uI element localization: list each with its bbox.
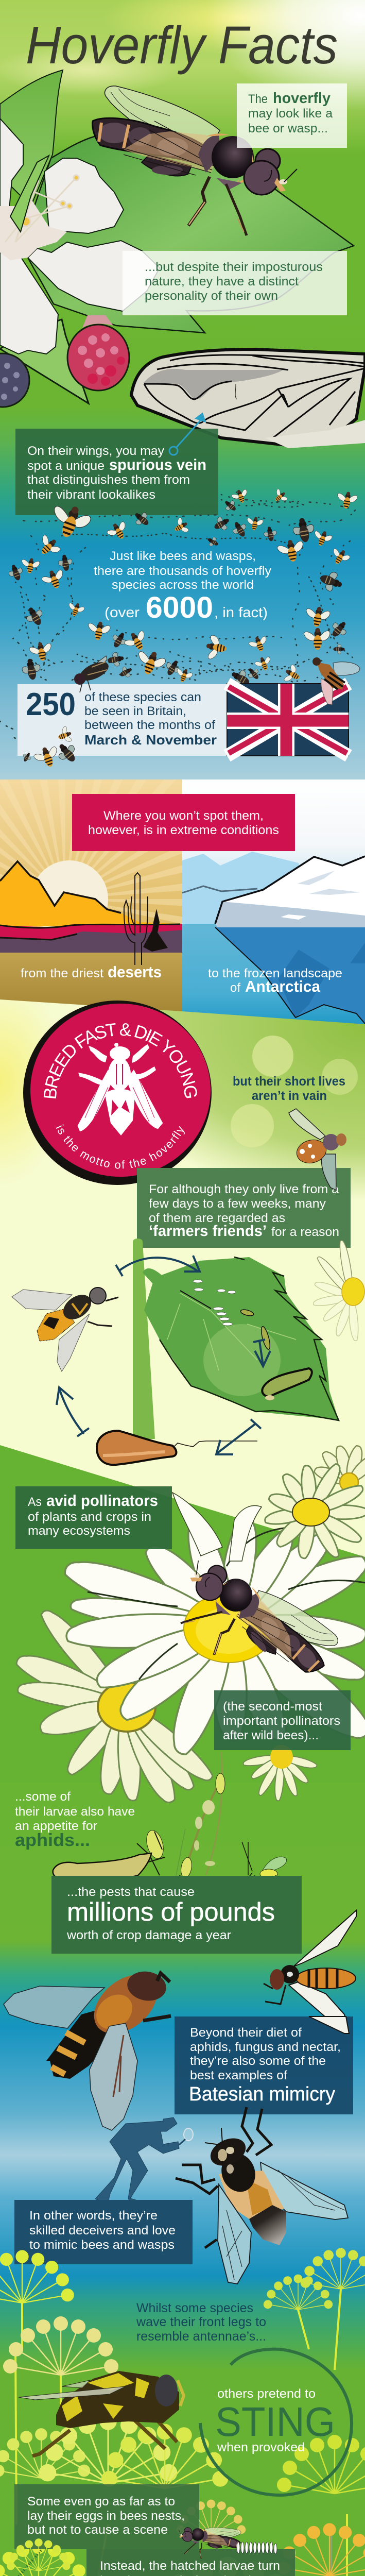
text box: second-most important: after wild bees)... bbox=[223, 1728, 319, 1742]
text: antarctica: of bbox=[230, 981, 240, 995]
text box: 250 species in Britain: 250 bbox=[26, 687, 76, 722]
daisy: small top right bbox=[312, 1240, 364, 1341]
text box: batesian mimicry bbox=[175, 2016, 353, 2114]
large orange fly on flag bbox=[312, 657, 360, 705]
text box: distinct personality: personality of their own bbox=[145, 289, 278, 303]
text box: skilled deceivers: skilled deceivers and love bbox=[29, 2224, 176, 2238]
text: short lives bbox=[233, 1074, 345, 1103]
text box: skilled deceivers bbox=[14, 2200, 193, 2264]
text box: the hoverfly: hoverfly bbox=[273, 90, 331, 107]
text box: distinct personality bbox=[123, 251, 347, 315]
stem bbox=[133, 1239, 155, 1439]
text box: 250 species in Britain: be seen in Britain, bbox=[84, 704, 186, 718]
text box: second-most important: (the second-most bbox=[223, 1700, 322, 1714]
text: wave front legs: Whilst some species bbox=[136, 2301, 253, 2315]
illustration: blossom, leaves and berries bbox=[0, 70, 354, 407]
text box: batesian mimicry: Batesian mimicry bbox=[189, 2083, 335, 2105]
text: larvae appetite for aphids: aphids... bbox=[15, 1831, 90, 1850]
bud stalk bbox=[10, 156, 49, 232]
green diagonal ground bbox=[0, 1445, 365, 1793]
stamens bbox=[5, 175, 79, 242]
text box: 250 species in Britain: of these species can bbox=[84, 690, 201, 704]
hoverfly on leaf bbox=[93, 86, 297, 235]
text box: eggs in bees nests bbox=[14, 2484, 199, 2549]
text: pretend to sting: STING bbox=[215, 2399, 335, 2445]
section background: meadow light bbox=[0, 850, 365, 1561]
text box: farmers friends: few days to a few weeks, many bbox=[149, 1197, 326, 1211]
text: thousands of species: there are thousands of hoverfly bbox=[94, 564, 271, 578]
wasp fly lower wing overlap bbox=[309, 2016, 349, 2033]
text: larvae appetite for aphids bbox=[15, 1790, 135, 1850]
text: wave front legs bbox=[136, 2301, 266, 2344]
swarm of hoverflies: individual flies bbox=[7, 487, 358, 690]
icon: white fly bbox=[77, 1042, 163, 1136]
text box: second-most important bbox=[214, 1690, 351, 1750]
text box: skilled deceivers: to mimic bees and wasps bbox=[29, 2238, 175, 2252]
text: larvae appetite for aphids: ...some of bbox=[15, 1790, 71, 1804]
raspberry bbox=[67, 315, 129, 391]
text box: the hoverfly: The bbox=[248, 92, 268, 106]
detective silhouette with magnifying glass bbox=[95, 2117, 193, 2204]
text: thousands of species: species across the world bbox=[112, 578, 254, 592]
text: wave front legs: wave their front legs to bbox=[136, 2315, 266, 2329]
text: antarctica: to the frozen landscape bbox=[208, 967, 342, 980]
white petals bbox=[0, 118, 160, 354]
text: antarctica bbox=[208, 967, 342, 995]
umbel over box bbox=[7, 2538, 71, 2571]
hoverfly: yellow and black bbox=[19, 2371, 184, 2456]
text box: spurious vein: spurious vein bbox=[109, 456, 206, 473]
text box: avid pollinators: of plants and crops in bbox=[28, 1510, 151, 1524]
daisy: right behind bbox=[313, 1445, 365, 1492]
dark berry bbox=[0, 353, 29, 407]
arrow: eggs to larva bbox=[253, 1340, 270, 1366]
text box: millions of pounds: ...the pests that cause bbox=[67, 1885, 195, 1899]
leaf with life cycle bbox=[143, 1257, 339, 1420]
text box: 250 species in Britain: March & November bbox=[84, 732, 217, 748]
text box: farmers friends: for a reason bbox=[271, 1225, 339, 1239]
young larvae bbox=[240, 1309, 272, 1350]
panel: desert bbox=[0, 779, 182, 1012]
text box: farmers friends: of them are regarded as bbox=[149, 1211, 285, 1225]
text box: eggs in bees nests: Some even go as far as to bbox=[27, 2495, 175, 2509]
text: deserts bbox=[21, 963, 162, 981]
lower sepals bbox=[0, 319, 89, 403]
text box: avid pollinators: avid pollinators bbox=[46, 1492, 158, 1510]
text: short lives: aren’t in vain bbox=[252, 1089, 327, 1103]
iceberg above water bbox=[215, 902, 365, 927]
arrow: larva to pupa bbox=[216, 1419, 261, 1454]
text box: avid pollinators bbox=[15, 1486, 172, 1549]
text: short lives: but their short lives bbox=[233, 1074, 345, 1089]
big leaf bbox=[28, 137, 354, 333]
hoverfly on daisy bbox=[157, 1521, 346, 1719]
arrow: pupa to adult bbox=[57, 1387, 89, 1436]
stems and aphids bbox=[137, 1752, 225, 1929]
text box: batesian mimicry: best examples of bbox=[190, 2069, 287, 2082]
upper leaf bbox=[0, 70, 63, 206]
eggs bbox=[193, 1280, 236, 1326]
ring around sting bbox=[200, 2349, 352, 2495]
band above landscapes bbox=[0, 773, 365, 779]
text box: hoovers: Instead, the hatched larvae turn bbox=[100, 2559, 280, 2573]
text: pretend to sting: others pretend to bbox=[217, 2387, 316, 2401]
text: thousands of species bbox=[94, 549, 271, 624]
small flies near the flag bbox=[21, 725, 81, 771]
wing with spurious vein bbox=[131, 349, 365, 448]
big hoverfly: striped bbox=[4, 1963, 171, 2130]
large dark fly on box bbox=[74, 656, 111, 692]
text: thousands of species: 6000 bbox=[146, 591, 213, 624]
text box: eggs in bees nests: lay their eggs in bees nests, bbox=[27, 2509, 185, 2523]
text box: distinct personality: nature, they have a distinct bbox=[145, 275, 299, 289]
banner: extreme conditions: however, is in extreme conditions bbox=[88, 823, 279, 837]
text box: the hoverfly: may look like a bbox=[248, 107, 333, 121]
big furry hoverfly bbox=[176, 2107, 348, 2284]
text: thousands of species: (over bbox=[105, 604, 140, 620]
text: thousands of species: Just like bees and wasps, bbox=[110, 549, 256, 563]
text box: hoovers bbox=[86, 2549, 295, 2576]
text box: millions of pounds: millions of pounds bbox=[67, 1897, 275, 1926]
text: thousands of species: , in fact) bbox=[214, 604, 268, 620]
far mountains bbox=[182, 852, 309, 924]
text box: millions of pounds bbox=[51, 1876, 302, 1954]
text box: millions of pounds: worth of crop damage a year bbox=[66, 1928, 231, 1942]
text box: batesian mimicry: they’re also some of the bbox=[190, 2054, 326, 2068]
larva eating aphid bbox=[53, 1853, 151, 1882]
text box: farmers friends: ‘farmers friends’ bbox=[149, 1223, 267, 1240]
banner: extreme conditions: Where you won’t spot them, bbox=[103, 809, 264, 823]
text box: the hoverfly bbox=[237, 83, 347, 148]
daisy: big central bbox=[60, 1514, 365, 1759]
text box: spurious vein bbox=[15, 429, 218, 515]
text box: second-most important: important pollinators bbox=[223, 1714, 340, 1728]
flower centre bbox=[0, 191, 67, 260]
title: Hoverfly Facts bbox=[26, 15, 338, 75]
white petals lower left of overlay bbox=[172, 1493, 262, 1561]
iceberg below water bbox=[215, 927, 365, 1024]
text box: spurious vein: that distinguishes them from bbox=[27, 473, 190, 487]
text: deserts: from the driest bbox=[21, 967, 103, 980]
panel: antarctica bbox=[182, 779, 365, 1024]
swarm of hoverflies: specks bbox=[0, 489, 355, 744]
arrow: adult to eggs bbox=[116, 1256, 200, 1276]
shrub bbox=[143, 909, 168, 952]
text box: 250 species in Britain bbox=[18, 684, 227, 756]
text box: distinct personality: ...but despite their imposturous bbox=[145, 260, 323, 274]
sunlight glow top right bbox=[0, 0, 365, 111]
arrow: pointer to vein bbox=[169, 414, 205, 455]
stems bbox=[15, 2289, 347, 2576]
text box: batesian mimicry: Beyond their diet of bbox=[190, 2026, 302, 2040]
small hoverfly laying eggs bbox=[170, 2507, 245, 2573]
daisy: third (small behind box) bbox=[242, 1745, 318, 1801]
text: larvae appetite for aphids: an appetite for bbox=[15, 1819, 97, 1833]
daisy: upper right overlay bbox=[264, 1462, 365, 1560]
larva bbox=[262, 1368, 312, 1396]
badge: breed fast and die young: BREED FAST & DIE YOUNG bbox=[43, 1023, 197, 1098]
aphid with wing bbox=[242, 1842, 287, 1887]
text box: avid pollinators: As bbox=[28, 1495, 42, 1509]
text box: avid pollinators: many ecosystems bbox=[28, 1524, 130, 1538]
daisy: second (lower left) bbox=[12, 1604, 218, 1807]
text: deserts: deserts bbox=[108, 963, 162, 981]
union flag bbox=[227, 684, 349, 756]
text box: eggs in bees nests: but not to cause a scene bbox=[27, 2523, 168, 2537]
text: pretend to sting bbox=[215, 2387, 335, 2454]
badge: breed fast and die young bbox=[23, 1001, 212, 1185]
text box: spurious vein: spot a unique bbox=[27, 459, 105, 473]
sun bbox=[31, 860, 108, 938]
text: wave front legs: resemble antennae’s... bbox=[136, 2329, 266, 2344]
text box: batesian mimicry: aphids, fungus and nectar, bbox=[190, 2040, 341, 2054]
text: pretend to sting: when provoked bbox=[217, 2441, 305, 2454]
banner: extreme conditions bbox=[72, 794, 295, 851]
text box: skilled deceivers: In other words, they’re bbox=[29, 2209, 158, 2223]
text box: farmers friends bbox=[137, 1168, 351, 1248]
badge: breed fast and die young: is the motto of the hoverfly bbox=[56, 1124, 185, 1168]
text box: farmers friends: For although they only live from a bbox=[149, 1182, 339, 1196]
hoverfly: wasp mimic bbox=[264, 1910, 356, 2033]
pupa bbox=[97, 1431, 257, 1465]
text: antarctica: Antarctica bbox=[245, 977, 321, 995]
text box: 250 species in Britain: between the months of bbox=[84, 718, 215, 732]
text box: spurious vein: their vibrant lookalikes bbox=[27, 488, 155, 502]
plants: dill and fennel umbels bbox=[0, 2248, 365, 2576]
landscape bands bbox=[0, 924, 182, 953]
background: green to blue gradient bbox=[0, 0, 365, 779]
text box: spurious vein: On their wings, you may bbox=[27, 444, 164, 458]
hoverfly adult: orange bbox=[12, 1287, 118, 1371]
eggs row bbox=[237, 2542, 277, 2554]
mountains bbox=[0, 861, 182, 926]
cactus bbox=[124, 873, 148, 965]
text: larvae appetite for aphids: their larvae also have bbox=[15, 1805, 135, 1819]
text box: the hoverfly: bee or wasp... bbox=[248, 122, 328, 135]
lower background: green to blue bbox=[0, 1783, 365, 2576]
small hoverfly on box bbox=[289, 1109, 346, 1190]
